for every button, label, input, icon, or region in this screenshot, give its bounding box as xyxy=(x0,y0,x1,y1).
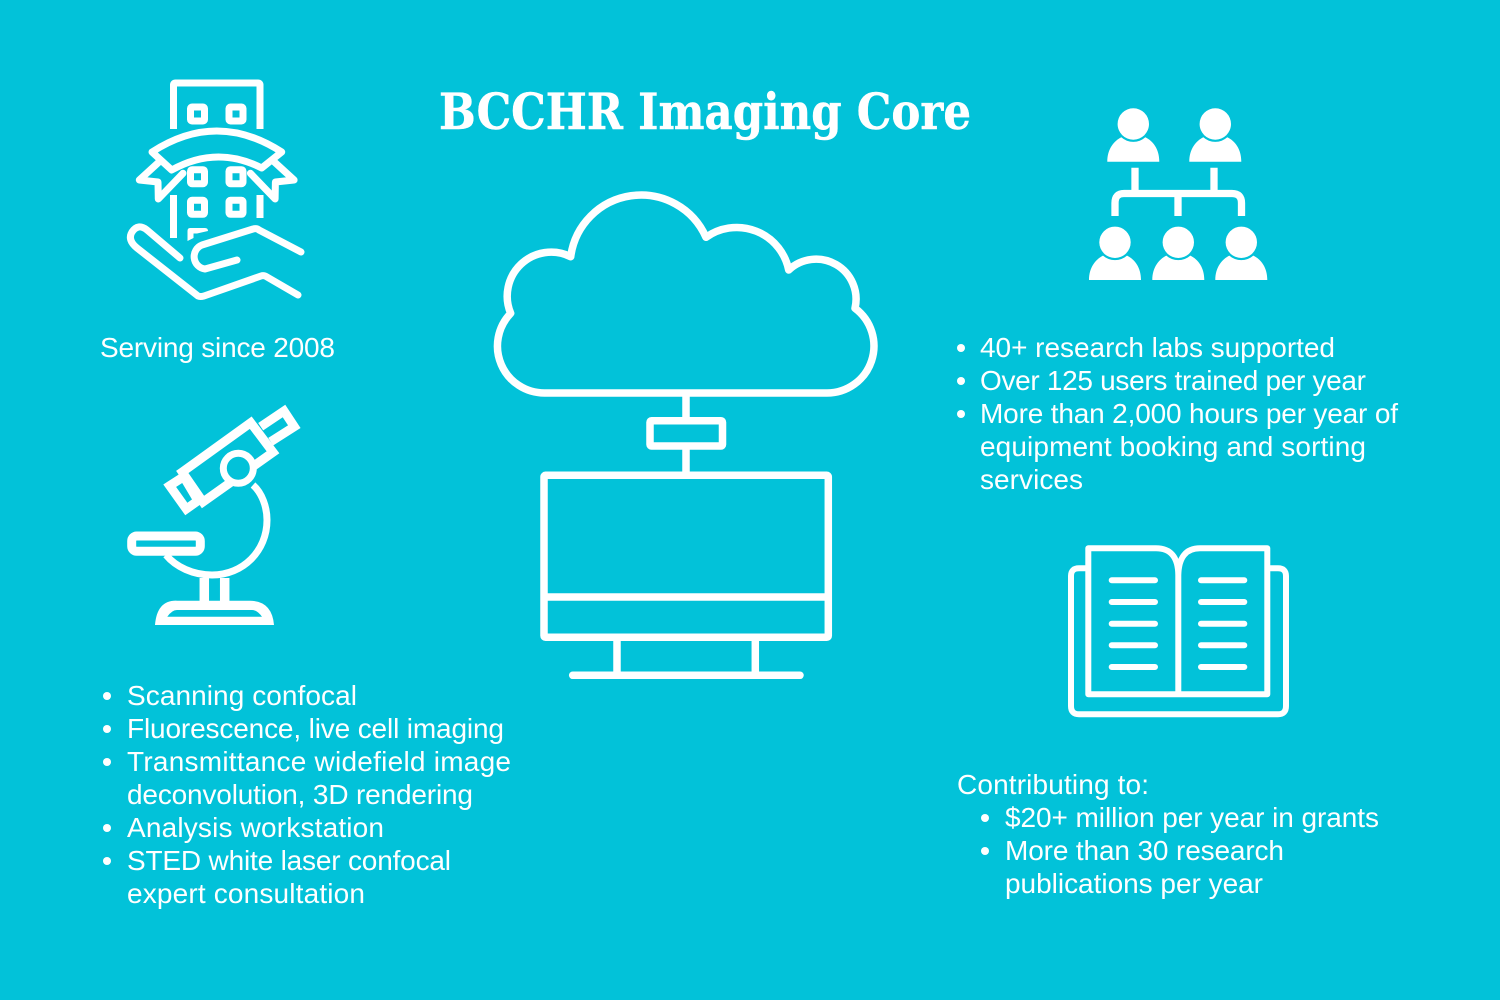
icon: open book xyxy=(1071,548,1286,714)
list: labs and users: More than 2,000 hours per year of xyxy=(980,398,1398,429)
list: imaging equipment xyxy=(103,680,511,909)
list: imaging equipment: Transmittance widefield image xyxy=(127,746,511,777)
list: imaging equipment: Scanning confocal xyxy=(127,680,357,711)
list: labs and users xyxy=(957,332,1398,495)
list: imaging equipment: Analysis workstation xyxy=(127,812,384,843)
list: labs and users: services xyxy=(980,464,1083,495)
list: contributing to: More than 30 research xyxy=(1005,835,1284,866)
icon: cloud connected to monitor xyxy=(497,195,874,675)
list: contributing to xyxy=(957,769,1379,899)
icon: people hierarchy xyxy=(1089,108,1267,280)
icon: microscope xyxy=(132,411,294,625)
list: imaging equipment: STED white laser confocal xyxy=(127,845,451,876)
list: labs and users: equipment booking and sorting xyxy=(980,431,1366,462)
title: BCCHR Imaging Core xyxy=(439,82,971,141)
list: contributing to: Contributing to: xyxy=(957,769,1149,800)
list: imaging equipment: deconvolution, 3D rendering xyxy=(127,779,473,810)
list: labs and users: Over 125 users trained per year xyxy=(980,365,1366,396)
list: contributing to: publications per year xyxy=(1005,868,1263,899)
list: contributing to: $20+ million per year in grants xyxy=(1005,802,1379,833)
list: labs and users: 40+ research labs supported xyxy=(980,332,1335,363)
icon: building held in hand with ribbon xyxy=(130,83,301,296)
list: imaging equipment: Fluorescence, live cell imaging xyxy=(127,713,504,744)
text: serving since: Serving since 2008 xyxy=(100,332,335,363)
list: imaging equipment: expert consultation xyxy=(127,878,365,909)
